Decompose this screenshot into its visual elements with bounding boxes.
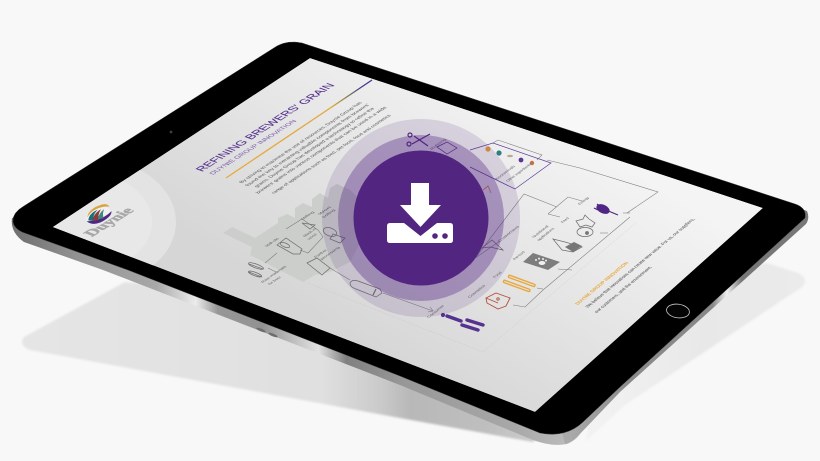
intro text: By striving to maximise the use of resources, Duynie Group has (238, 101, 365, 184)
icon: pet food box (523, 253, 560, 270)
innovation heading: DUYNIE GROUP INNOVATION (574, 261, 631, 306)
icon: kettle (322, 226, 345, 243)
icon: download arrow (400, 183, 441, 227)
grey staircase backdrop (224, 184, 359, 282)
diagram labels: Energy (576, 196, 590, 205)
purple box outline (470, 143, 551, 189)
icon: lauter tun (307, 258, 330, 275)
icon: malt silo (277, 238, 302, 254)
accent line (226, 80, 372, 178)
diagram labels: Consumer (425, 304, 446, 318)
icon: cones (482, 240, 503, 250)
intro text: brewers' grains into various components that can be used in a wide (255, 106, 389, 194)
diagram labels: processing (318, 246, 341, 260)
icon: wheat stalks (248, 261, 264, 278)
icon: mill (302, 223, 315, 229)
tray buttons (432, 233, 448, 239)
innovation text: We believe that innovations can create new value. For us, our suppliers, (584, 218, 697, 309)
product icons (485, 146, 534, 165)
diagram labels: Milling (299, 211, 315, 220)
subtitle: DUYNIE GROUP INNOVATION (208, 119, 299, 176)
product labels: Biochemicals (493, 165, 516, 180)
middle ring (338, 135, 504, 301)
dotted border (308, 222, 637, 352)
icon: tray (387, 223, 453, 243)
diagram labels: Feed (559, 217, 570, 223)
refined products box (470, 140, 551, 189)
title: REFINING BREWERS' GRAIN (194, 82, 338, 173)
diagram labels: Nutritional (530, 225, 550, 238)
diagram labels: Food (491, 271, 503, 278)
volume buttons (256, 327, 278, 338)
icon: consumers (441, 313, 483, 330)
icon: refining unit (437, 142, 457, 154)
icon: orange chevron (483, 186, 491, 193)
diagram labels: Refining (428, 138, 447, 150)
diagram labels: Pet food (511, 251, 526, 260)
logo halo circles (53, 170, 176, 266)
page background (53, 58, 763, 412)
diagram labels: vessel (305, 233, 318, 240)
icon: cosmetics jar (486, 293, 510, 309)
diagram labels: for beer (266, 275, 283, 285)
front camera (170, 131, 172, 133)
innovation text: our customers, and the environment. (593, 266, 654, 314)
intro text: found the key to extracting valuable components from brewers' (244, 103, 372, 187)
logo wordmark: Duynie (81, 206, 139, 238)
process diagram (248, 133, 658, 352)
product labels (494, 164, 532, 182)
icon: plug (594, 203, 618, 215)
icon: flask (553, 239, 582, 252)
icon: wheat in silo (280, 242, 290, 248)
diagram labels: Mash in (301, 228, 317, 237)
diagram labels: Further (312, 248, 329, 258)
diagram labels: Wort (316, 205, 334, 215)
silver edge: lower right (560, 205, 808, 444)
diagram labels: Raw materials (259, 265, 288, 283)
silver edge: lower left (12, 215, 580, 445)
diagram labels: applications (535, 227, 556, 241)
diagram labels: boiling (320, 209, 336, 218)
home button (666, 303, 690, 319)
intro text: grains. Duynie Group has developed a technology to refine the (253, 107, 377, 188)
diagram labels: Cosmetics (466, 284, 487, 298)
diagram labels: Customers (496, 225, 521, 242)
tablet shadow (22, 263, 805, 442)
purple disc (354, 150, 488, 286)
logo swirl (86, 204, 112, 224)
icon: cow (576, 215, 595, 227)
diagram labels (259, 138, 590, 318)
diagram labels: Malt silo (263, 237, 280, 247)
process lines (265, 160, 658, 312)
outer ring (322, 119, 520, 317)
product labels: Other ingredients (504, 163, 533, 182)
icon: scissors (407, 133, 430, 146)
icon: pig (577, 227, 593, 237)
icon: food cutlery (503, 275, 535, 292)
icon: bottle (350, 280, 382, 297)
intro text: range of applications such as feed, pet food, food and cosmetics (270, 114, 393, 195)
logo: Duynie (82, 204, 134, 238)
download badge (322, 119, 520, 317)
screen page (4, 58, 763, 412)
grid connectors (493, 140, 542, 160)
